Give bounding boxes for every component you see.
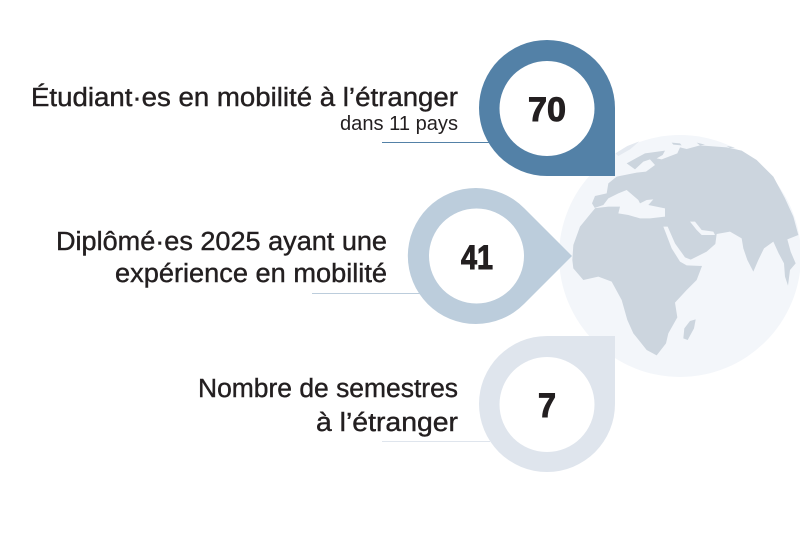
continents	[572, 141, 798, 355]
label 3	[198, 375, 459, 437]
label 2: Diplômé·es 2025 ayant une	[56, 228, 387, 256]
value 7: 7	[538, 387, 556, 425]
globe	[559, 135, 800, 377]
pin 3: 7 semestres	[479, 336, 615, 472]
label 3: Nombre de semestres	[198, 375, 458, 403]
leader line 1	[382, 142, 489, 144]
label 2: expérience en mobilité	[115, 260, 387, 288]
leader line 2	[312, 292, 420, 294]
value 41: 41	[461, 239, 493, 277]
Madagascar	[683, 319, 696, 340]
northern lands	[615, 141, 639, 156]
label 1: Étudiant·es en mobilité à l’étranger	[31, 83, 459, 112]
label 1	[31, 83, 459, 135]
leader line 3	[382, 440, 490, 442]
pin 1: 70 étudiant·es	[479, 40, 615, 176]
label 3: à l’étranger	[316, 409, 459, 437]
value 70: 70	[528, 91, 566, 129]
label 2	[56, 228, 387, 288]
seas	[593, 190, 665, 218]
pin 2: 41 diplômé·es	[408, 188, 572, 324]
label 1: dans 11 pays	[340, 113, 458, 135]
